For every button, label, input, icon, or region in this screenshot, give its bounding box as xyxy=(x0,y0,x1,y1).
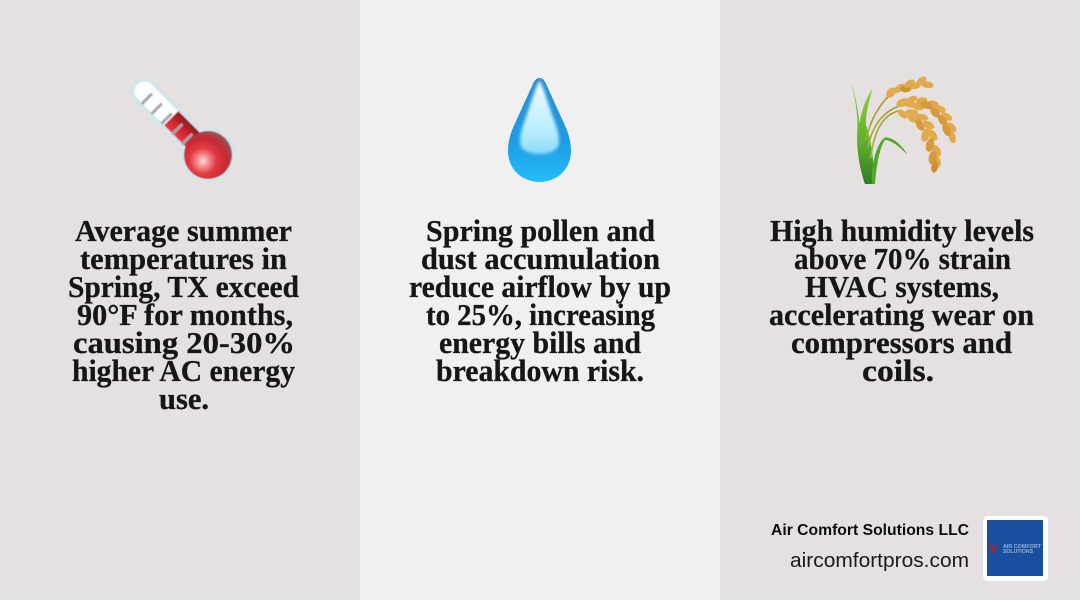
text block: humidity: compressors and xyxy=(791,325,1012,360)
text block: temperature: Spring, TX exceed xyxy=(68,269,299,304)
text block: humidity: coils. xyxy=(862,353,934,388)
text block: temperature: Average summer xyxy=(75,213,292,248)
text block: humidity: above 70% strain xyxy=(794,241,1011,276)
text block: temperature: temperatures in xyxy=(80,241,287,276)
logo xyxy=(983,516,1048,581)
text block: pollen: dust accumulation xyxy=(421,241,660,276)
text block: pollen xyxy=(409,213,671,388)
text block: temperature: 90°F for months, xyxy=(77,297,293,332)
panel: humidity background xyxy=(720,0,1080,600)
panel: temperature background xyxy=(0,0,360,600)
text block: pollen: reduce airflow by up xyxy=(409,269,671,304)
text block: humidity: HVAC systems, xyxy=(805,269,999,304)
text block: pollen: Spring pollen and xyxy=(426,213,655,248)
logo: AIR COMFORT xyxy=(1003,544,1041,550)
text block: pollen: breakdown risk. xyxy=(436,353,644,388)
icon: thermometer xyxy=(116,63,247,194)
panel: pollen background xyxy=(360,0,720,600)
logo: SOLUTIONS xyxy=(1003,549,1034,555)
text block: pollen: to 25%, increasing xyxy=(426,297,655,332)
text block: temperature xyxy=(68,213,299,416)
icon: rice plant xyxy=(851,75,958,184)
text block: humidity xyxy=(769,213,1034,388)
text block: pollen: energy bills and xyxy=(439,325,641,360)
company name: Air Comfort Solutions LLC xyxy=(771,522,969,539)
text block: temperature: use. xyxy=(159,381,209,416)
icon: water drop xyxy=(508,78,571,182)
text block: temperature: higher AC energy xyxy=(72,353,295,388)
website: aircomfortpros.com xyxy=(790,550,969,572)
text block: humidity: High humidity levels xyxy=(770,213,1034,248)
text block: humidity: accelerating wear on xyxy=(769,297,1034,332)
text block: temperature: causing 20-30% xyxy=(73,325,295,360)
